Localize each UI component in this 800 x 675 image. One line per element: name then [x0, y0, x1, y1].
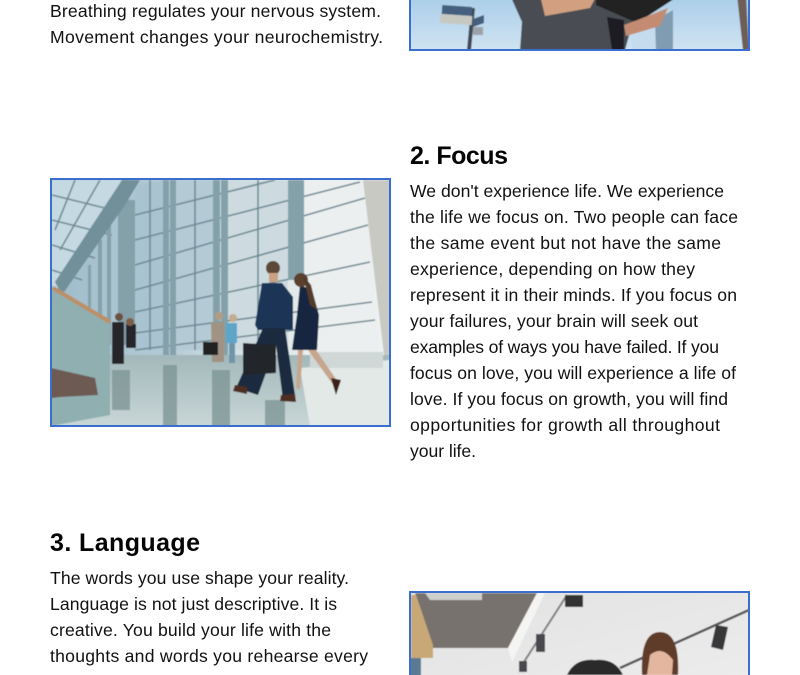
background people: [112, 313, 136, 364]
heading: 2. Focus: 2. Focus: [410, 142, 508, 170]
text block: breathing section ending: Breathing regulates your nervous system.: [50, 1, 381, 21]
window transoms: [52, 180, 375, 350]
text block: focus paragraph: your failures, your brain will seek out: [410, 311, 698, 331]
text block: breathing section ending: [50, 1, 383, 47]
text block: focus paragraph: [410, 181, 738, 461]
text block: language paragraph: [50, 568, 368, 666]
photo: businessman holding a folder: [410, 0, 749, 50]
text block: focus paragraph: the life we focus on. Two people can face: [410, 207, 738, 227]
text block: language paragraph: The words you use shape your reality.: [50, 568, 349, 588]
text block: focus paragraph: opportunities for growth all throughout: [410, 415, 720, 435]
text block: focus paragraph: experience, depending on how they: [410, 259, 695, 279]
heading: 3. Language: 3. Language: [50, 529, 200, 557]
text block: focus paragraph: focus on love, you will experience a life of: [410, 363, 736, 383]
columns: [88, 180, 304, 370]
text block: language paragraph: Language is not just descriptive. It is: [50, 594, 337, 614]
floor: [51, 355, 390, 426]
photo: business people walking through a glass atrium: [51, 179, 390, 426]
text block: focus paragraph: We don't experience life. We experience: [410, 181, 724, 201]
text block: breathing section ending: Movement changes your neurochemistry.: [50, 27, 383, 47]
text block: focus paragraph: your life.: [410, 441, 476, 461]
photo: colleagues in a bright office: [410, 592, 749, 675]
text block: focus paragraph: examples of ways you have failed. If you: [410, 337, 719, 357]
text block: focus paragraph: love. If you focus on growth, you will find: [410, 389, 728, 409]
text block: language paragraph: thoughts and words you rehearse every: [50, 646, 368, 666]
text block: language paragraph: creative. You build your life with the: [50, 620, 331, 640]
text block: focus paragraph: the same event but not have the same: [410, 233, 721, 253]
man walking: [255, 283, 293, 330]
woman walking: [292, 285, 319, 350]
text block: focus paragraph: represent it in their minds. If you focus on: [410, 285, 737, 305]
